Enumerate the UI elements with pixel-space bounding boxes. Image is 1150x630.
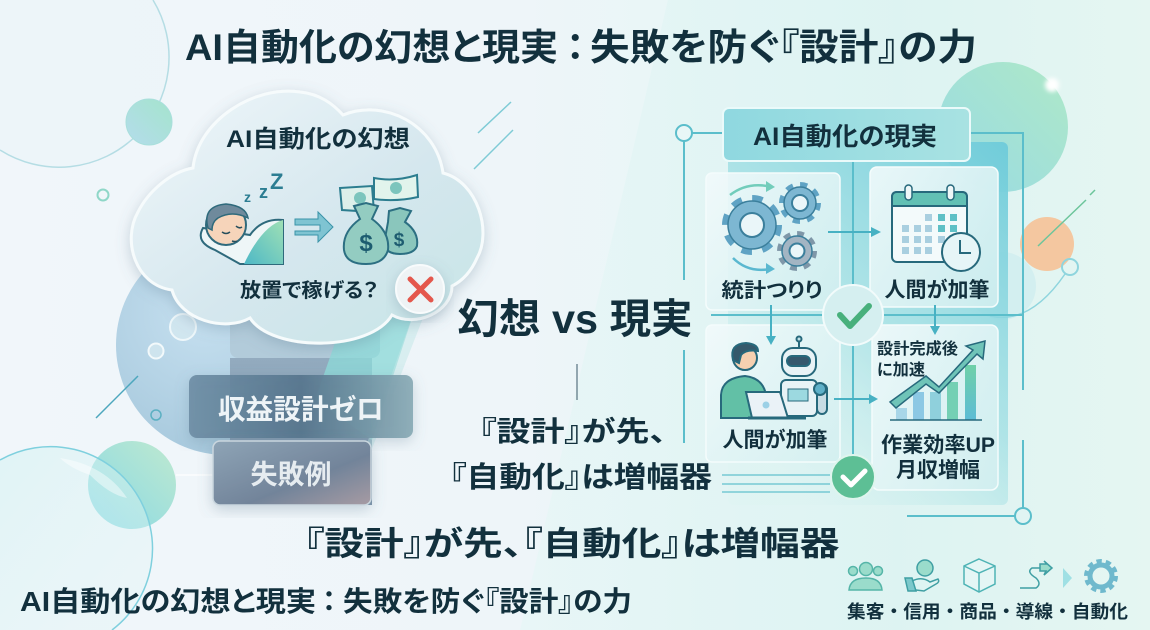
- header text: AI自動化の現実: [753, 123, 937, 151]
- card label: 人間が加筆: [884, 278, 990, 302]
- icon: calendar: [892, 185, 980, 271]
- arrow: [295, 212, 333, 242]
- icon: money bills: [340, 175, 418, 212]
- icon: money bags: $: [394, 230, 405, 251]
- badge: upper check: [823, 285, 883, 345]
- icon: product: [964, 559, 995, 592]
- icon: chevron: [1063, 568, 1072, 588]
- card: statistics: [706, 173, 840, 310]
- connector lines: [676, 125, 1031, 524]
- title: 失敗を防ぐ『設計』の力: [590, 27, 977, 68]
- caption: 放置で稼げる？: [240, 279, 378, 302]
- text: design first: 『設計』が先、: [480, 415, 666, 447]
- icon: funnel route: [1020, 561, 1052, 588]
- footer icons: [847, 559, 1128, 622]
- cloud heading: AI自動化の幻想: [226, 126, 410, 153]
- label: 失敗例: 失敗例: [250, 460, 332, 490]
- card: growth result: [872, 325, 998, 490]
- title: AI自動化の幻想と現実: [185, 27, 558, 68]
- orbs right: [938, 62, 1095, 320]
- zzz large: z: [259, 182, 268, 202]
- card label: 人間が加筆: [722, 428, 828, 452]
- icon: trust: [905, 560, 939, 591]
- panel: failure label: [189, 375, 413, 438]
- footer title: [20, 586, 632, 617]
- panel: reality frame: [676, 108, 1031, 524]
- icon: sleeping person: [201, 204, 283, 264]
- text: income: 月収増幅: [896, 459, 980, 482]
- subheading: 『設計』が先、『自動化』は増幅器: [304, 525, 840, 562]
- footer title: ：: [322, 586, 336, 617]
- icon: money bags: [344, 203, 417, 264]
- title: ：: [566, 27, 584, 68]
- zzz small: z: [244, 189, 251, 205]
- text: after design: 設計完成後: [877, 339, 958, 358]
- footer title: AI自動化の幻想と現実: [20, 586, 316, 617]
- card: human and robot: [706, 325, 840, 462]
- header box: [723, 108, 970, 161]
- panel: failure example: [213, 441, 371, 505]
- icon: person and robot: [721, 336, 827, 418]
- heading: fantasy vs reality: 幻想 vs 現実: [458, 296, 692, 342]
- footer title: 失敗を防ぐ『設計』の力: [343, 586, 632, 617]
- icon: growth chart: [890, 341, 985, 420]
- card label: 統計つりり: [722, 279, 822, 302]
- divider line: [576, 364, 578, 400]
- icon: gears: [725, 181, 818, 274]
- arrows between cards: [766, 227, 940, 404]
- pillar under cloud: [230, 300, 430, 505]
- label: 収益設計ゼロ: 収益設計ゼロ: [218, 394, 384, 425]
- card: calendar: [870, 167, 998, 307]
- icon: red cross badge: [396, 265, 444, 313]
- text: design first: [450, 415, 712, 494]
- icon: customers: [848, 562, 882, 590]
- icon: automation gear: [1087, 562, 1115, 590]
- text: efficiency: 作業効率UP: [881, 434, 995, 457]
- badge: lower check: [831, 455, 875, 499]
- text: automation amplifier: 『自動化』は増幅器: [450, 461, 712, 494]
- title: [185, 27, 977, 68]
- icon: money bags: $: [359, 230, 373, 257]
- footer labels: 集客・信用・商品・導線・自動化: [847, 602, 1128, 622]
- decorative bubbles left: [0, 99, 513, 630]
- zzz largest: Z: [270, 169, 283, 194]
- text: accelerate: に加速: [877, 361, 925, 379]
- panel: fantasy cloud: [131, 91, 483, 343]
